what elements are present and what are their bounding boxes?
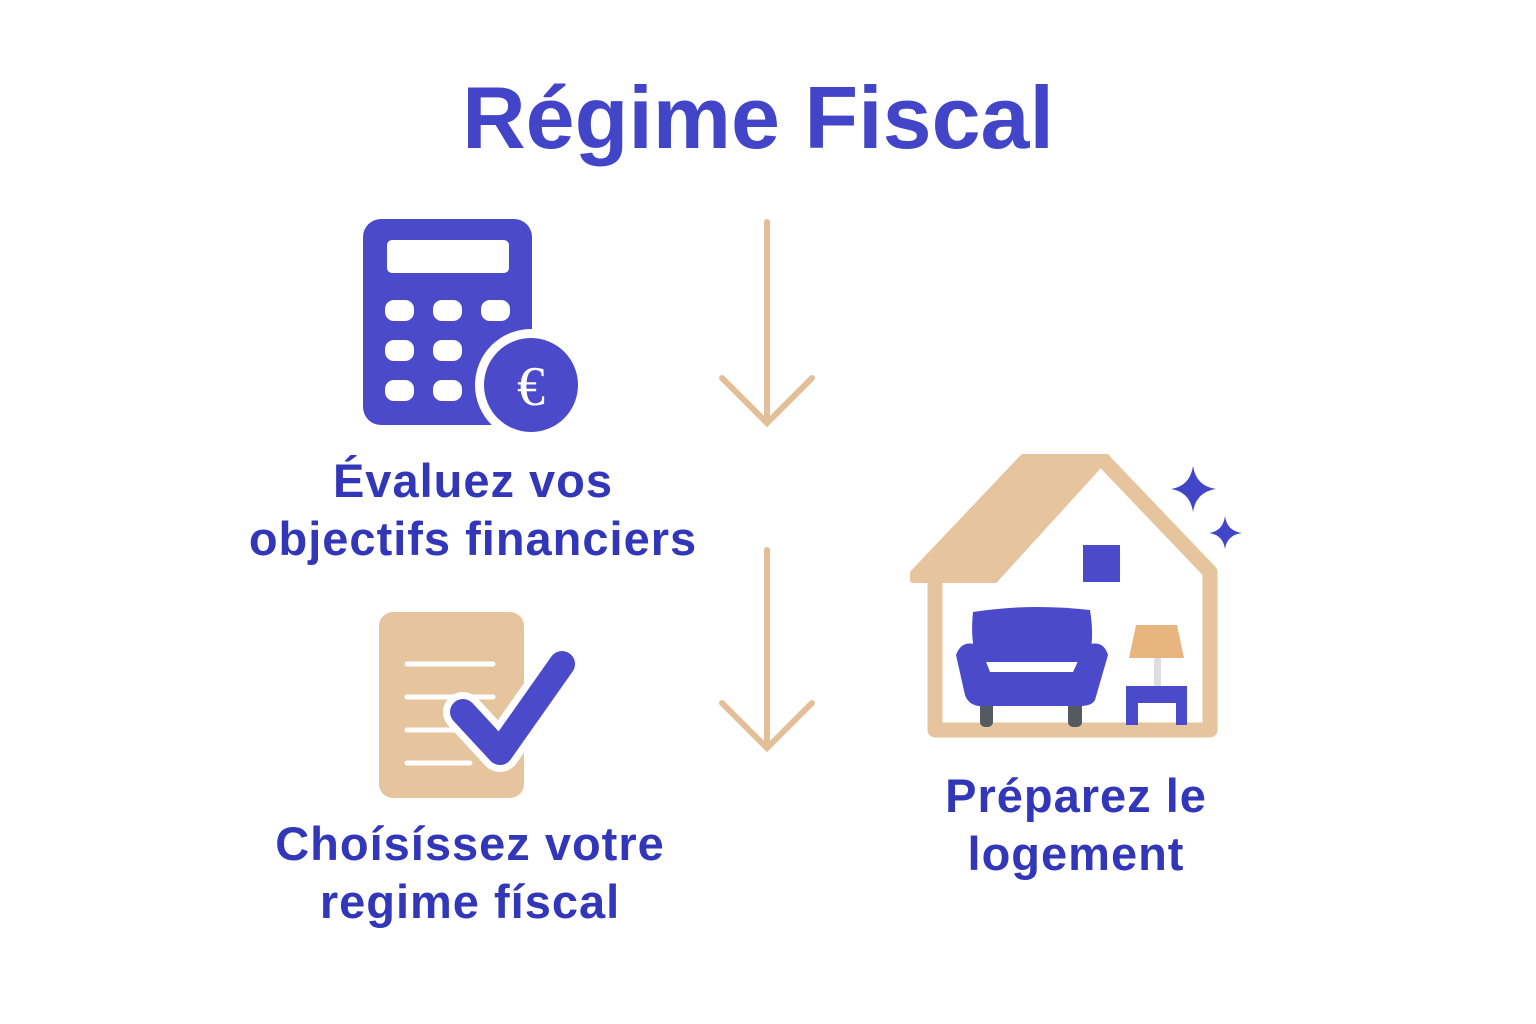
arrow: down 1 [722,222,812,423]
icon: document with check [379,612,562,798]
title: Régime Fiscal [462,68,1054,167]
label: step 1: objectifs financiers [249,512,697,565]
label: step 2: Choísíssez votre [275,817,665,870]
label: step 1 [249,454,697,565]
label: step 3 [945,769,1207,880]
arrow: down 2 [722,550,812,748]
label: step 2 [275,817,665,928]
icon: calculator: € [517,356,545,418]
label: step 3: Préparez le [945,769,1207,822]
label: step 2: regime físcal [320,875,620,928]
icon: house with furniture [913,457,1242,730]
label: step 1: Évaluez vos [333,454,613,507]
label: step 3: logement [968,827,1184,880]
icon: calculator [363,219,587,441]
